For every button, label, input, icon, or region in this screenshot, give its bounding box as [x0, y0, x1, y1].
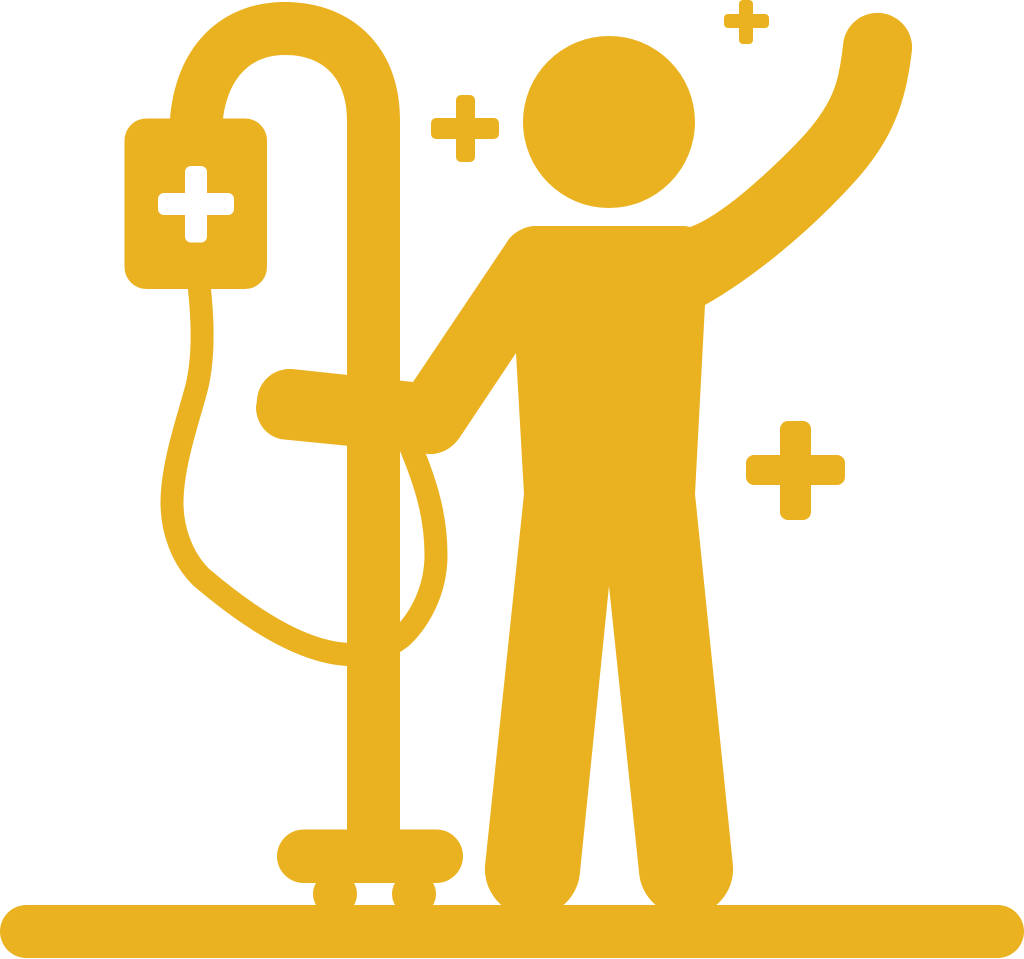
icon: small plus top	[724, 0, 769, 44]
icon: patient figure	[256, 13, 912, 917]
patient arm holding the stand	[256, 369, 430, 454]
icon: IV stand	[170, 2, 463, 916]
icon: IV tube	[172, 285, 436, 655]
icon: medium plus	[431, 95, 499, 162]
patient head	[523, 36, 695, 208]
patient body, legs and raised arm	[413, 13, 912, 917]
icon: bag medical cross	[158, 166, 234, 242]
ground bar	[0, 905, 1024, 958]
icon: IV bag	[124, 118, 267, 289]
icon: large plus	[746, 421, 845, 520]
